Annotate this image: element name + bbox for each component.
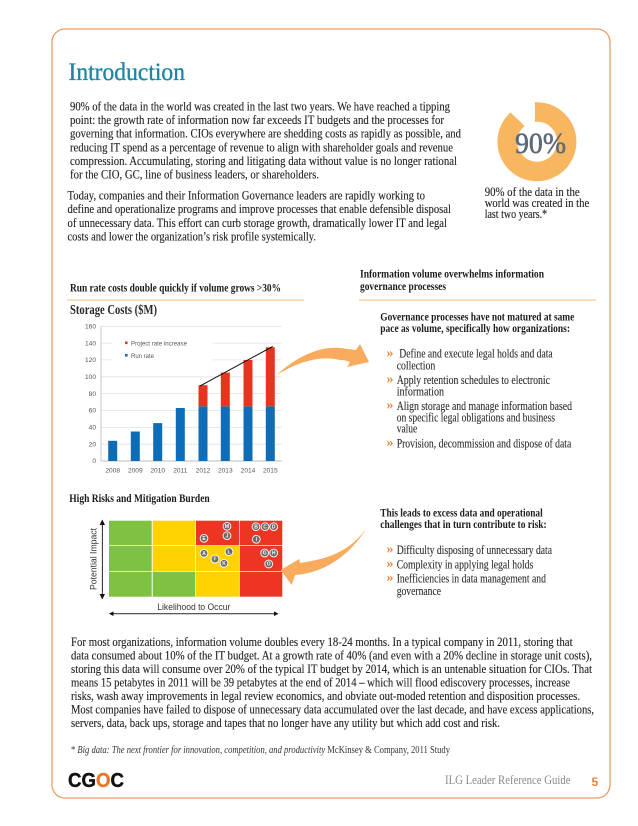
footer guide title: ILG Leader Reference Guide	[445, 773, 571, 787]
governance bullet list: information	[397, 385, 444, 399]
horizontal axis arrow	[109, 611, 278, 616]
chart title: Storage Costs ($M)	[70, 302, 157, 317]
risk subheading: challenges that in turn contribute to risk:	[380, 517, 547, 531]
bar chart: storage costs: 0	[92, 458, 96, 465]
governance bullet list: Apply retention schedules to electronic	[397, 373, 550, 387]
risk matrix: E	[202, 536, 206, 542]
risk matrix: F	[213, 557, 217, 563]
left section heading: Run rate costs double quickly if volume grows >30%	[70, 281, 281, 295]
risk matrix: C	[263, 524, 267, 530]
risk bullet list: »	[386, 571, 394, 586]
bar chart: storage costs: 2011	[173, 468, 188, 474]
risk subheading: This leads to excess data and operational	[380, 505, 543, 519]
donut caption	[485, 185, 590, 221]
intro paragraph 2	[68, 188, 451, 244]
risk matrix	[109, 521, 282, 597]
risk matrix: O	[267, 562, 271, 568]
bottom paragraph	[71, 635, 594, 730]
bar chart: storage costs: 2013	[218, 468, 233, 474]
intro paragraph 2: Today, companies and their Information Governance leaders are rapidly working to	[68, 188, 425, 202]
vertical axis arrow	[100, 520, 105, 600]
bottom paragraph: For most organizations, information volume doubles every 18-24 months. In a typical company in 2011, storing that	[71, 635, 573, 649]
intro paragraph 1	[70, 100, 462, 182]
left heading rule	[67, 300, 304, 301]
risk bullet list: governance	[397, 584, 441, 598]
risk bullet list: Inefficiencies in data management and	[397, 572, 547, 586]
bar chart: storage costs: Run rate	[131, 353, 154, 360]
bar chart: storage costs: Project rate increase	[131, 340, 187, 347]
risk subheading	[380, 505, 547, 531]
horizontal axis label: Likelihood to Occur	[157, 602, 230, 612]
donut chart: 90%: 90%	[515, 127, 566, 160]
risk matrix: I	[256, 537, 258, 543]
bar chart: storage costs: 160	[85, 324, 96, 330]
governance bullet list: Provision, decommission and dispose of data	[397, 436, 572, 450]
governance subheading	[380, 309, 575, 335]
governance bullet list: Align storage and manage information based	[397, 399, 573, 413]
risk matrix: D	[272, 524, 276, 530]
bar chart: storage costs: 80	[89, 391, 96, 398]
risk matrix: M	[225, 524, 229, 530]
bar chart: storage costs: 40	[89, 424, 96, 432]
intro paragraph 1: governing that information. CIOs everywhere are shedding costs as rapidly as possible, and	[70, 127, 462, 141]
risk matrix: B	[254, 524, 258, 530]
bar chart: storage costs: 60	[89, 408, 96, 415]
risk matrix: G	[263, 551, 267, 557]
risk bullet list: Complexity in applying legal holds	[397, 558, 533, 572]
bar chart: storage costs: 100	[85, 374, 96, 381]
governance bullet list: on specific legal obligations and business	[397, 411, 555, 425]
governance bullet list: value	[397, 422, 418, 436]
risk matrix: A	[202, 551, 206, 557]
title: Introduction	[68, 59, 185, 86]
donut chart: 90%	[497, 102, 576, 181]
bar chart: storage costs: 2010	[150, 468, 165, 474]
risk bullet list: »	[386, 542, 394, 557]
risk bullet list: Difficulty disposing of unnecessary data	[397, 543, 552, 557]
intro paragraph 1: for the CIO, GC, line of business leaders, or shareholders.	[70, 168, 319, 182]
governance bullet list: »	[386, 346, 394, 361]
bar chart: storage costs: 2014	[241, 468, 256, 474]
bar chart: storage costs: 2009	[128, 468, 143, 474]
risk matrix: L	[227, 549, 231, 555]
governance bullet list: Define and execute legal holds and data	[399, 347, 553, 361]
governance bullet list: »	[386, 398, 394, 413]
risk heading: High Risks and Mitigation Burden	[69, 491, 210, 505]
risk matrix: K	[222, 561, 226, 567]
right heading rule	[359, 300, 596, 301]
donut caption: 90% of the data in the	[485, 185, 580, 199]
logo: CGOC: CGOC	[68, 769, 124, 792]
arrow: challenges to risk matrix	[281, 528, 367, 585]
bar chart: storage costs: 2008	[105, 468, 120, 474]
bar chart: storage costs	[85, 324, 282, 474]
governance subheading: Governance processes have not matured at same	[380, 309, 575, 323]
intro paragraph 2: define and operationalize programs and improve processes that enable defensible disposal	[68, 202, 451, 216]
donut caption: last two years.*	[485, 207, 547, 221]
intro paragraph 1: compression. Accumulating, storing and litigating data without value is no longer rational	[70, 154, 457, 168]
page number: 5	[592, 775, 598, 789]
risk bullet list	[386, 542, 552, 598]
intro paragraph 1: 90% of the data in the world was created in the last two years. We have reached a tipping	[70, 100, 450, 114]
bar chart: storage costs: 120	[85, 357, 96, 364]
governance bullet list: »	[386, 372, 394, 387]
governance bullet list: collection	[397, 358, 435, 372]
bar chart: storage costs: 2012	[196, 468, 211, 474]
right section heading: governance processes	[360, 279, 446, 293]
intro paragraph 2: costs and lower the organization’s risk profile systemically.	[68, 230, 316, 244]
risk matrix: H	[272, 551, 276, 557]
intro paragraph 2: of unnecessary data. This effort can curb storage growth, dramatically lower IT and legal	[68, 216, 447, 230]
bar chart: storage costs: 20	[89, 441, 96, 448]
governance bullet list: »	[386, 436, 394, 450]
governance subheading: pace as volume, specifically how organizations:	[380, 321, 570, 335]
donut caption: world was created in the	[485, 196, 590, 210]
bottom paragraph: means 15 petabytes in 2011 will be 39 petabytes at the end of 2014 – which will flood ediscovery processes, increase	[71, 675, 570, 689]
risk bullet list: »	[386, 557, 394, 572]
bar chart: storage costs: 2015	[263, 468, 278, 474]
vertical axis label: Potential Impact	[88, 528, 98, 590]
intro paragraph 1: point: the growth rate of information now far exceeds IT budgets and the processes for	[70, 113, 445, 127]
intro paragraph 1: reducing IT spend as a percentage of revenue to align with shareholder goals and revenue	[70, 140, 453, 154]
governance bullet list	[386, 346, 573, 450]
arrow: chart to governance	[277, 344, 369, 375]
right section heading	[360, 267, 544, 293]
bar chart: storage costs: 140	[85, 340, 96, 347]
footnote: * Big data: The next frontier for innovation, competition, and productivity McKinsey & Company, 2011 Study	[71, 745, 451, 756]
right section heading: Information volume overwhelms information	[360, 267, 544, 281]
risk matrix: J	[226, 533, 229, 539]
bottom paragraph: servers, data, back ups, storage and tapes that no longer have any utility but which add cost and risk.	[71, 716, 500, 730]
